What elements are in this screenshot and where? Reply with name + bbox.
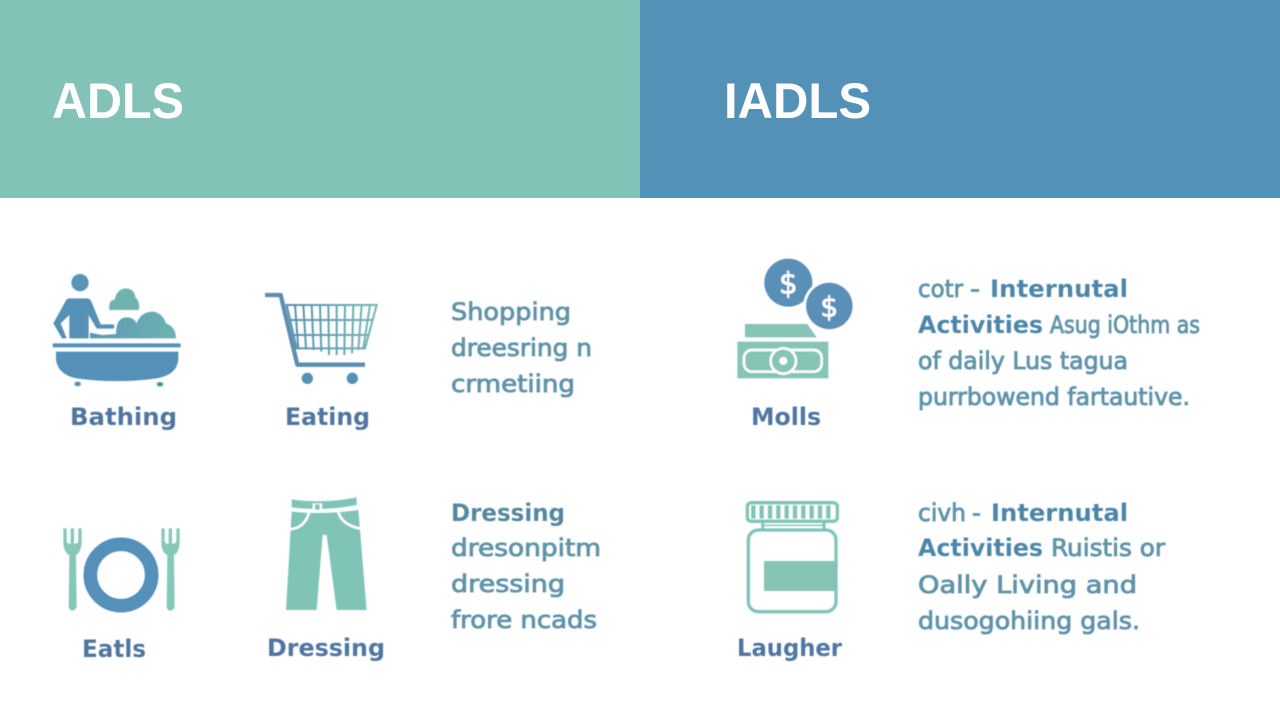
text block: Dressing description: dressing — [451, 570, 565, 598]
text block: Shopping description — [451, 298, 592, 398]
icon: shopping cart — [265, 295, 377, 384]
text block: Dressing description — [451, 499, 601, 634]
label: Bathing: Bathing — [70, 403, 177, 431]
text block: IADLS definition two: Ruistis or — [1051, 534, 1165, 562]
heading: IADLS: IADLS — [724, 73, 871, 129]
text block: IADLS definition one: - — [970, 275, 980, 303]
text block: IADLS definition two: Internutal — [991, 499, 1128, 527]
text block: IADLS definition two — [918, 499, 1165, 635]
icon: plate and forks — [63, 528, 180, 611]
text block: Shopping description: dreesring n — [451, 334, 592, 362]
icon: jar — [747, 503, 837, 612]
text block: Shopping description: crmetiing — [451, 370, 575, 398]
text block: IADLS definition one: Asug iOthm as — [1050, 311, 1200, 339]
text block: IADLS definition one: Internutal — [990, 275, 1128, 303]
text block: Dressing description: frore ncads — [451, 606, 597, 634]
panel: ADLS items — [53, 274, 601, 663]
text block: Shopping description: Shopping — [451, 298, 571, 326]
panel: IADLS header — [640, 0, 1280, 198]
text block: IADLS definition two: Activities — [918, 534, 1043, 562]
icon: money and coins: $ — [820, 291, 838, 324]
text block: IADLS definition one: of daily Lus tagua — [918, 347, 1128, 375]
text block: IADLS definition two: Oally Living and — [918, 571, 1137, 599]
label: Dressing: Dressing — [267, 634, 385, 662]
label: Molls: Molls — [751, 403, 821, 431]
icon: person bathing in tub — [53, 274, 181, 387]
icon: money and coins — [737, 259, 855, 378]
panel: IADLS items — [737, 259, 1200, 662]
text block: IADLS definition one: cotr — [918, 275, 963, 303]
text block: IADLS definition one — [918, 275, 1200, 411]
icon: trousers — [286, 497, 367, 610]
text block: IADLS definition two: dusogohiing gals. — [918, 607, 1140, 635]
label: Laugher: Laugher — [737, 634, 842, 662]
text block: IADLS definition one: purrbowend fartautive. — [918, 383, 1190, 411]
text block: Dressing description: dresonpitm — [451, 534, 601, 562]
heading: ADLS: ADLS — [52, 73, 184, 129]
text block: IADLS definition one: Activities — [918, 311, 1043, 339]
label: Eating: Eating — [285, 403, 370, 431]
text block: IADLS definition two: civh — [918, 499, 966, 527]
label: Eatls: Eatls — [82, 635, 146, 663]
text block: IADLS definition two: - — [972, 499, 981, 527]
panel: ADLS header — [0, 0, 640, 198]
icon: money and coins: $ — [779, 266, 798, 300]
text block: Dressing description: Dressing — [451, 499, 565, 527]
